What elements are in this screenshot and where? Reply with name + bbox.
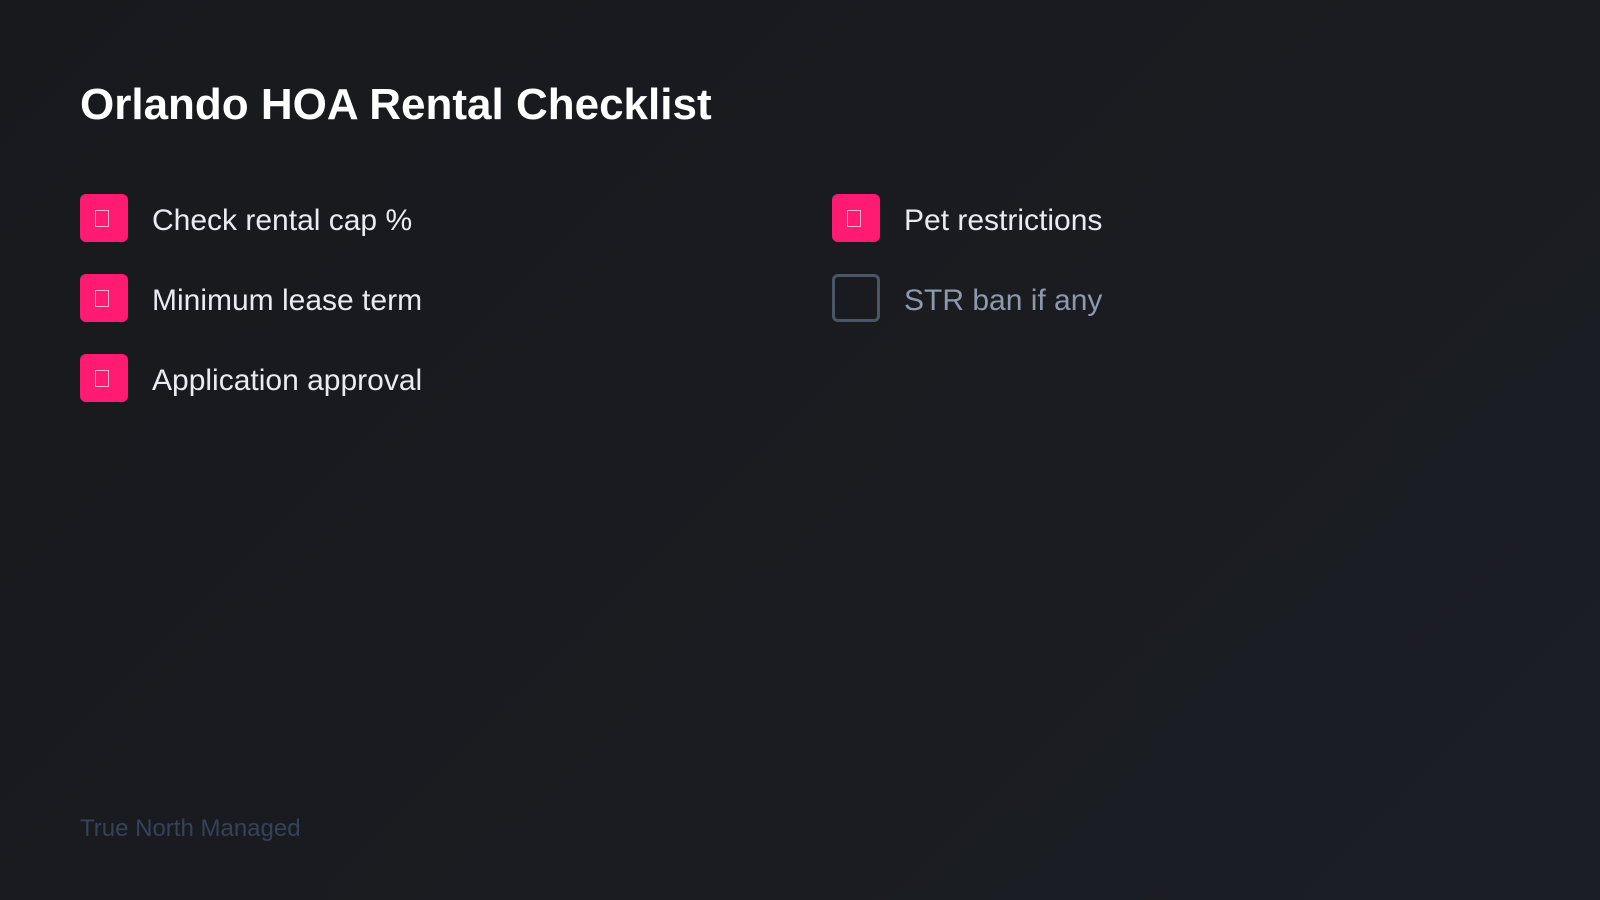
item: application approval: Application approval bbox=[152, 364, 422, 397]
item: pet restrictions: Pet restrictions bbox=[904, 204, 1102, 237]
item: STR ban unchecked bbox=[832, 274, 1102, 322]
title: Orlando HOA Rental Checklist bbox=[80, 80, 712, 129]
item: check rental cap bbox=[80, 194, 412, 242]
item: minimum lease term: Minimum lease term bbox=[152, 284, 422, 317]
item: pet restrictions bbox=[832, 194, 1102, 242]
item: application approval bbox=[80, 354, 422, 402]
item: check rental cap: Check rental cap % bbox=[152, 204, 412, 237]
item: STR ban unchecked: STR ban if any bbox=[904, 284, 1102, 317]
footer: True North Managed bbox=[80, 815, 301, 842]
item: minimum lease term bbox=[80, 274, 422, 322]
